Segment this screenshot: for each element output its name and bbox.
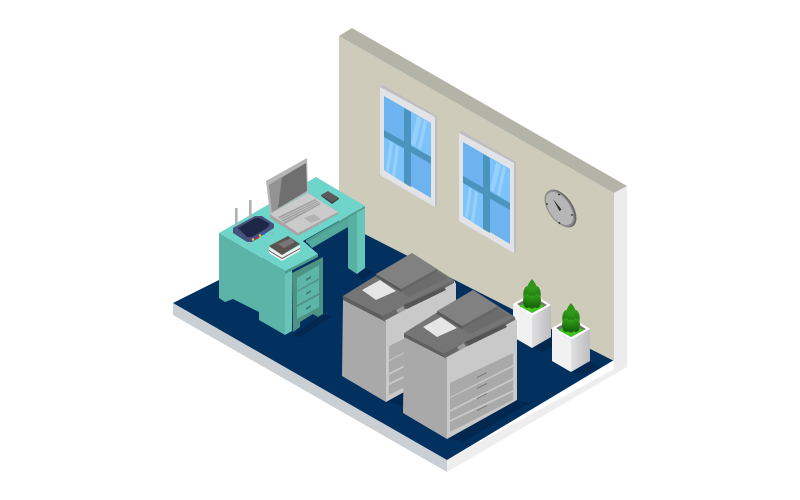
desk bbox=[219, 177, 374, 337]
wifi router bbox=[233, 200, 274, 245]
floor slab bbox=[173, 220, 627, 472]
desk right leg and back panel bbox=[306, 208, 365, 274]
desk left pedestal bbox=[219, 233, 285, 335]
desk top bbox=[285, 254, 318, 274]
laptop bbox=[266, 158, 338, 236]
plant 2 bbox=[552, 303, 600, 376]
smartphone bbox=[321, 191, 339, 204]
back wall bbox=[339, 28, 627, 373]
desk shadow bbox=[293, 315, 332, 337]
window 2 bbox=[459, 131, 516, 253]
stack of books bbox=[269, 236, 300, 261]
wall clock bbox=[544, 183, 576, 234]
plant 1 bbox=[513, 279, 561, 352]
drawer cabinet bbox=[292, 257, 323, 332]
copier 1 bbox=[342, 253, 469, 405]
copier 2 bbox=[403, 290, 530, 442]
window 1 bbox=[380, 85, 437, 207]
